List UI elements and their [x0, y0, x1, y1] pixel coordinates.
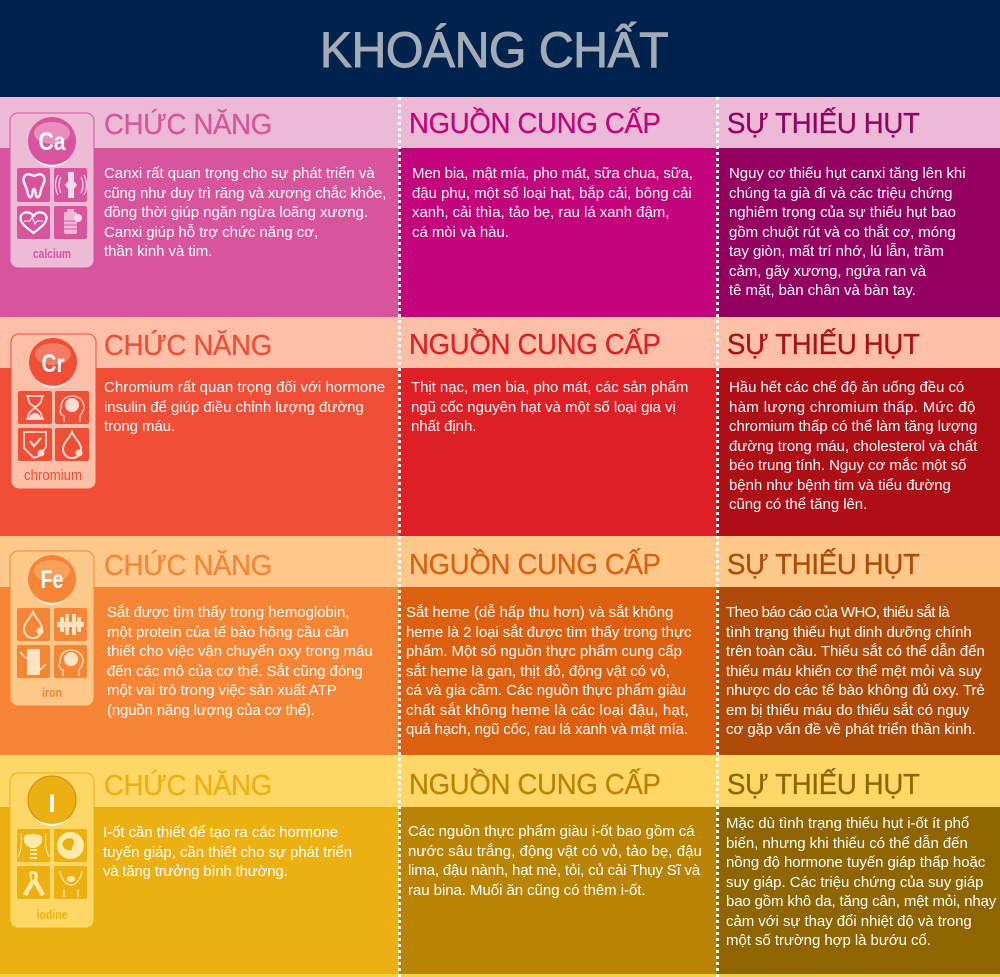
text: chromium function: trong máu.	[104, 418, 175, 435]
text: chromium sources: nhất định.	[411, 418, 476, 435]
icon: I element circle	[28, 776, 76, 826]
text: iron function: (nguồn năng lượng của cơ thể).	[107, 702, 315, 719]
icon: neck goitre	[54, 866, 87, 899]
text: iron deficiency: trên toàn cầu. Thiếu sắt có thể dẫn đến	[726, 643, 985, 660]
heading: calcium deficiency: SỰ THIẾU HỤT	[727, 108, 920, 140]
icon: bone	[17, 645, 50, 678]
text: iodine deficiency: Mặc dù tình trạng thiếu hụt i-ốt ít phổ	[726, 815, 969, 832]
text: calcium deficiency: chúng ta già đi và các triệu chứng	[729, 185, 952, 202]
badge: iron	[10, 550, 94, 706]
icon: Ca element circle: Ca	[38, 128, 66, 156]
text: iodine function: tuyến giáp, cần thiết cho sự phát triển	[103, 844, 352, 861]
text: chromium function: Chromium rất quan trọng đối với hormone	[104, 379, 385, 396]
label: chromium: chromium	[24, 467, 82, 484]
badge: chromium	[10, 334, 96, 488]
column divider: left	[398, 97, 401, 977]
icon: blood drop	[55, 428, 89, 461]
text: iodine function: I-ốt cần thiết để tạo ra các hormone	[103, 824, 338, 841]
text: calcium function: cũng như duy trì răng và xương chắc khỏe,	[104, 185, 386, 202]
text: chromium deficiency: béo trung tính. Nguy cơ mắc một số	[729, 457, 966, 474]
text: iron function: một protein của tế bào hồng cầu cần	[107, 624, 349, 641]
text: calcium deficiency	[729, 165, 966, 299]
heading: iron function: CHỨC NĂNG	[104, 550, 272, 582]
text: iodine sources	[408, 823, 702, 899]
icon: Cr element circle: Cr	[42, 350, 65, 378]
column divider: right	[716, 97, 719, 977]
heading: chromium function: CHỨC NĂNG	[104, 330, 272, 362]
text: chromium sources: ngũ cốc nguyên hạt và một số loại gia vị	[411, 399, 676, 416]
text: calcium function: Canxi giúp hỗ trợ chức năng cơ,	[104, 224, 318, 241]
text: iron sources: phẩm. Một số nguồn thực phẩm cung cấp	[406, 643, 682, 660]
text: iodine sources: nước sâu trắng, động vật có vỏ, tảo bẹ, đậu	[408, 843, 702, 860]
icon: hourglass	[18, 391, 52, 424]
heading: iron deficiency: SỰ THIẾU HỤT	[727, 549, 920, 581]
text: calcium sources	[412, 165, 693, 241]
text: iodine deficiency: nồng độ hormone tuyến giáp thấp hoặc	[726, 854, 985, 871]
icon: dumbbell	[54, 608, 87, 641]
label: iron: iron	[42, 685, 62, 700]
text: iron sources: chất sắt không heme là các loại đậu, hạt,	[406, 702, 689, 719]
text: iron sources	[406, 604, 692, 738]
text: calcium deficiency: nghiêm trọng của sự thiếu hụt bao	[729, 204, 956, 221]
text: iodine deficiency: cảm với sự thay đổi nhiệt độ và trong	[726, 913, 972, 930]
panel: chromium row	[0, 317, 1000, 536]
icon: thyroid	[17, 829, 50, 862]
text: calcium deficiency: gồm chuột rút và co thắt cơ, móng	[729, 224, 956, 241]
text: calcium sources: đậu phụ, một số loại hạt, bắp cải, bông cải	[412, 185, 692, 202]
text: chromium deficiency: bệnh như bệnh tim và tiểu đường	[729, 477, 951, 494]
text: iron sources: heme là 2 loại sắt được tìm thấy trong thực	[406, 624, 691, 641]
text: iron function: một vai trò trong việc sản xuất ATP	[107, 682, 337, 699]
badge: calcium	[10, 112, 94, 268]
text: chromium deficiency: đường trong máu, cholesterol và chất	[729, 438, 977, 455]
text: calcium sources: Men bia, mật mía, pho mát, sữa chua, sữa,	[412, 165, 693, 182]
text: calcium deficiency: cảm, gãy xương, ngứa ran và	[729, 263, 926, 280]
text: calcium function: Canxi rất quan trọng cho sự phát triển và	[104, 165, 375, 182]
text: chromium function	[104, 379, 385, 435]
text: iodine sources: Các nguồn thực phẩm giàu i-ốt bao gồm cá	[408, 823, 695, 840]
text: iodine deficiency: suy giáp. Các triệu chứng của suy giáp	[726, 874, 983, 891]
text: calcium sources: cá mòi và hàu.	[412, 224, 509, 241]
icon: Fe element circle	[28, 555, 76, 605]
text: iron function: Sắt được tìm thấy trong hemoglobin,	[107, 604, 349, 621]
text: calcium function	[104, 165, 386, 260]
text: calcium deficiency: tê mặt, bàn chân và bàn tay.	[729, 282, 916, 299]
text: iron function: thiết cho việc vận chuyển oxy trong máu	[107, 643, 373, 660]
icon: battery	[54, 206, 87, 239]
text: iron deficiency	[726, 604, 985, 738]
text: calcium function: thần kinh và tim.	[104, 243, 212, 260]
heading: iodine sources: NGUỒN CUNG CẤP	[409, 769, 661, 801]
text: calcium deficiency: tay giòn, mất trí nhớ, lú lẫn, trầm	[729, 243, 944, 260]
title: KHOÁNG CHẤT	[320, 22, 668, 78]
text: calcium deficiency: Nguy cơ thiếu hụt canxi tăng lên khi	[729, 165, 966, 182]
text: iodine function	[103, 824, 352, 880]
text: iron function: đến các mô của cơ thể. Sắt cũng đóng	[107, 663, 363, 680]
panel: iodine row	[0, 755, 1000, 977]
text: iodine sources: rau bina. Muối ăn cũng có thêm i-ốt.	[408, 882, 646, 899]
text: chromium deficiency: Hầu hết các chế độ ăn uống đều có	[729, 379, 964, 396]
text: chromium deficiency: cũng có thể tăng lên.	[729, 496, 867, 513]
icon: I element circle: I	[49, 790, 55, 818]
icon: Fe element circle: Fe	[40, 566, 64, 594]
heading: chromium deficiency: SỰ THIẾU HỤT	[727, 329, 920, 361]
text: chromium sources: Thịt nạc, men bia, pho mát, các sản phẩm	[411, 379, 688, 396]
icon: fetus	[54, 829, 87, 862]
icon: shield check	[18, 428, 52, 461]
text: iodine deficiency	[726, 815, 996, 949]
text: iron deficiency: em bị thiếu máu do thiếu sắt có nguy	[726, 702, 969, 719]
panel: calcium row	[0, 97, 1000, 317]
text: iodine function: và tăng trưởng bình thường.	[103, 863, 287, 880]
text: iron deficiency: cơ gặp vấn đề về phát triển thần kinh.	[726, 721, 976, 738]
text: iron deficiency: nhược do các tế bào không đủ oxy. Trẻ	[726, 682, 985, 699]
label: iodine: iodine	[36, 907, 68, 922]
text: iodine sources: lima, đậu nành, hạt mè, tỏi, củ cải Thụy Sĩ và	[408, 862, 700, 879]
text: iron sources: quả hạch, ngũ cốc, rau lá xanh và mật mía.	[406, 721, 688, 738]
text: iron function	[107, 604, 373, 719]
icon: head with brain	[55, 391, 89, 424]
panel: iron row	[0, 536, 1000, 755]
text: iron sources: Sắt heme (dễ hấp thu hơn) và sắt không	[406, 604, 673, 621]
heading: calcium sources: NGUỒN CUNG CẤP	[409, 108, 661, 140]
text: calcium sources: xanh, cải thìa, tảo bẹ, rau lá xanh đậm,	[412, 204, 669, 221]
heading: chromium sources: NGUỒN CUNG CẤP	[409, 329, 661, 361]
text: iodine deficiency: một số trường hợp là bướu cổ.	[726, 932, 931, 949]
icon: Ca element circle	[28, 117, 76, 167]
text: iron deficiency: tình trạng thiếu hụt dinh dưỡng chính	[726, 624, 972, 641]
label: calcium: calcium	[33, 246, 71, 261]
text: chromium deficiency: chromium thấp có thể làm tăng lượng	[729, 418, 977, 435]
text: iodine deficiency: bao gồm khô da, tăng cân, mệt mỏi, nhạy	[726, 893, 996, 910]
heading: iron sources: NGUỒN CUNG CẤP	[409, 549, 661, 581]
icon: awareness ribbon	[17, 866, 50, 899]
text: iron deficiency: thiếu máu khiến cơ thể mệt mỏi và suy	[726, 663, 982, 680]
icon: blood drop	[17, 608, 50, 641]
icon: Cr element circle	[29, 338, 77, 388]
text: iodine deficiency: biến, nhưng khi thiếu có thể dẫn đến	[726, 835, 968, 852]
text: iron deficiency: Theo báo cáo của WHO, thiếu sắt là	[726, 604, 949, 621]
text: iron sources: cá và gia cầm. Các nguồn thực phẩm giàu	[406, 682, 686, 699]
text: chromium deficiency	[729, 379, 978, 513]
badge: iodine	[10, 772, 94, 928]
icon: heart rate	[17, 206, 50, 239]
text: calcium function: đồng thời giúp ngăn ngừa loãng xương.	[104, 204, 368, 221]
text: chromium function: insulin để giúp điều chỉnh lượng đường	[104, 399, 364, 416]
text: chromium deficiency: hàm lượng chromium thấp. Mức độ	[729, 399, 976, 416]
heading: calcium function: CHỨC NĂNG	[104, 109, 272, 141]
icon: tooth	[17, 168, 50, 202]
heading: iodine function: CHỨC NĂNG	[104, 770, 272, 802]
text: iron sources: sắt heme là gan, thịt đỏ, động vật có vỏ,	[406, 663, 670, 680]
text: chromium sources	[411, 379, 688, 435]
icon: joint	[54, 168, 87, 202]
icon: head with brain	[54, 645, 87, 678]
heading: iodine deficiency: SỰ THIẾU HỤT	[727, 769, 920, 801]
